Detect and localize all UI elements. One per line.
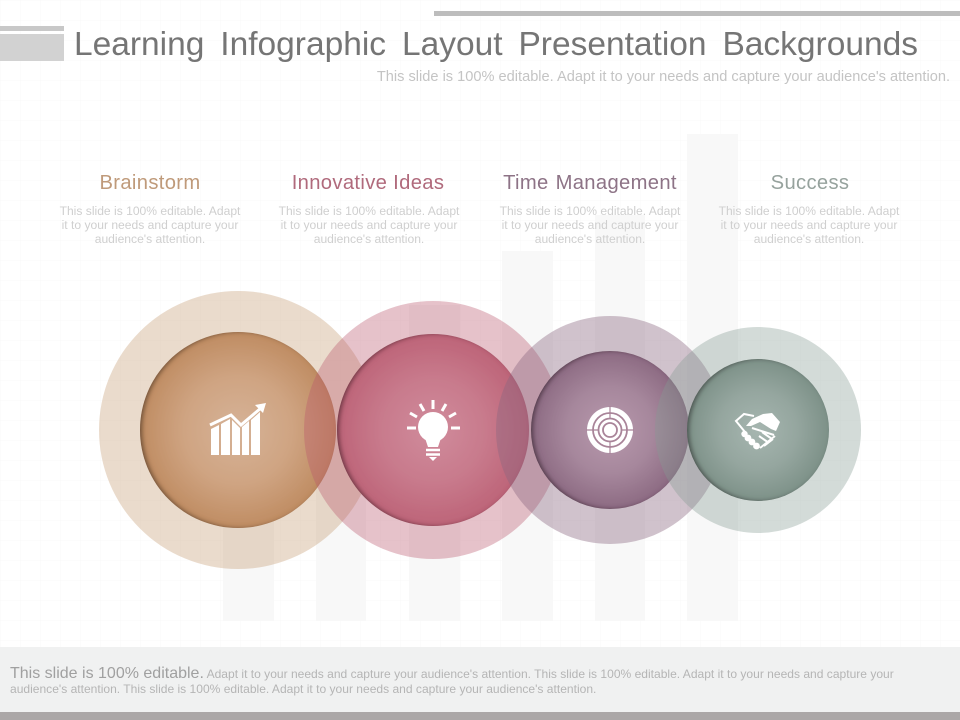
text: Success description: audience's attention.: [754, 232, 864, 246]
subtitle: This slide is 100% editable. Adapt it to your needs and capture your audience's attention.: [377, 69, 950, 85]
heading: Time Management: Time Management: [503, 172, 677, 194]
header accent: top right bar: [434, 11, 960, 16]
text: Brainstorm description: it to your needs and capture your: [62, 218, 238, 232]
circle: time management core: [531, 351, 689, 509]
text: Time Management description: This slide is 100% editable. Adapt: [500, 204, 680, 218]
title: Learning Infographic Layout Presentation Backgrounds: [74, 26, 918, 63]
footer text: [10, 664, 894, 696]
text: Time Management description: [500, 204, 680, 246]
text: Brainstorm description: audience's attention.: [95, 232, 205, 246]
text: Success description: it to your needs and capture your: [721, 218, 897, 232]
icon: target: [586, 406, 634, 454]
header accent: left blocks: [0, 26, 64, 61]
text: Time Management description: audience's attention.: [535, 232, 645, 246]
text: Innovative Ideas description: [278, 204, 460, 246]
text: Brainstorm description: [60, 204, 240, 246]
heading: Success: Success: [771, 172, 849, 194]
circle: success outer ring: [655, 327, 861, 533]
footer panel: [0, 647, 960, 712]
circle: success core: [687, 359, 829, 501]
text: Time Management description: it to your needs and capture your: [502, 218, 678, 232]
footer text: This slide is 100% editable. Adapt it to your needs and capture your audience's attention. This slide is 100% editable. Adapt it to your needs and capture your: [10, 664, 894, 682]
text: Success description: This slide is 100% editable. Adapt: [719, 204, 899, 218]
circle: time management outer ring: [496, 316, 724, 544]
circle: innovative ideas core: [337, 334, 529, 526]
heading: Innovative Ideas: Innovative Ideas: [292, 172, 444, 194]
footer bar: [0, 712, 960, 720]
icon: growth chart: [210, 403, 266, 455]
text: Innovative Ideas description: it to your needs and capture your: [281, 218, 457, 232]
circle: brainstorm outer ring: [99, 291, 377, 569]
circle: brainstorm core: [140, 332, 336, 528]
text: Brainstorm description: This slide is 100% editable. Adapt: [60, 204, 240, 218]
footer text: audience's attention. This slide is 100% editable. Adapt it to your needs and capture your audience's attention.: [10, 682, 596, 696]
heading: Brainstorm: Brainstorm: [99, 172, 201, 194]
icon: handshake: [736, 413, 780, 449]
icon: light bulb: [407, 400, 460, 461]
text: Innovative Ideas description: This slide is 100% editable. Adapt: [279, 204, 459, 218]
text: Success description: [718, 204, 900, 246]
background bars: [223, 134, 738, 621]
circle: innovative ideas outer ring: [304, 301, 562, 559]
text: Innovative Ideas description: audience's attention.: [314, 232, 424, 246]
